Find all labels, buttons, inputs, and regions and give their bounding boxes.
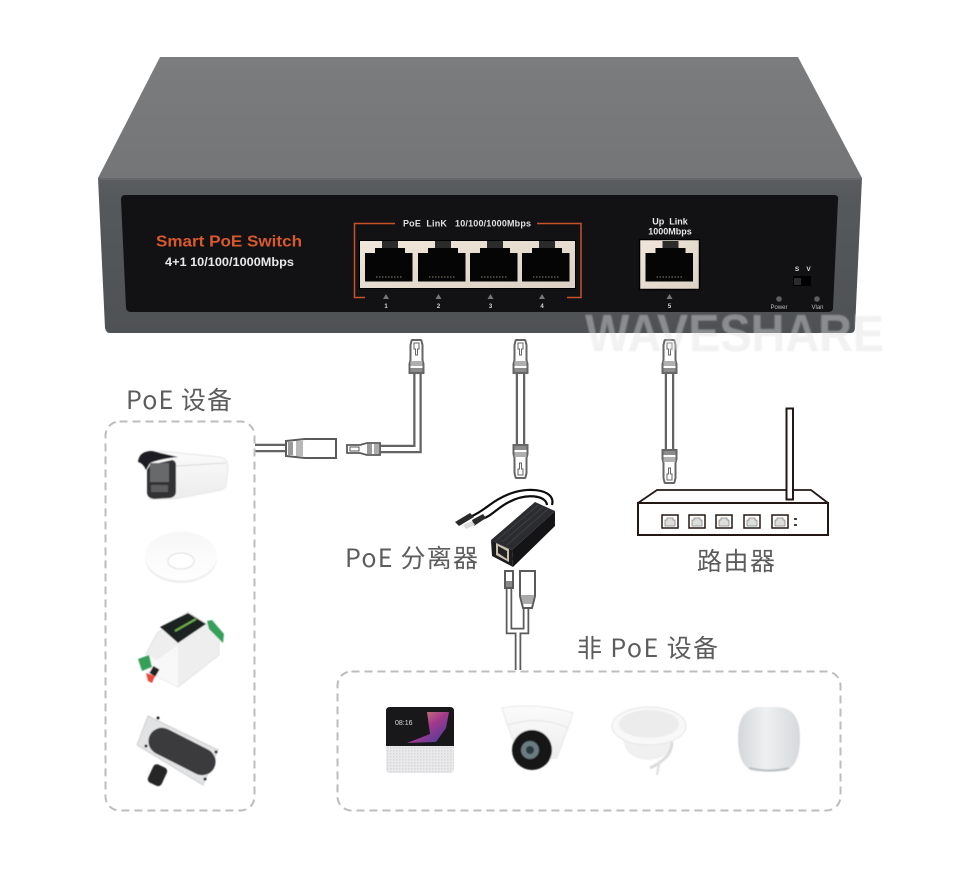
port numbers xyxy=(383,294,672,310)
LEDs xyxy=(770,296,824,311)
model title: Smart PoE Switch xyxy=(156,234,302,250)
splitter side face xyxy=(512,511,555,567)
PoE splitter xyxy=(455,490,555,567)
non-PoE heading: 非 PoE 设备 xyxy=(577,629,718,665)
S V dip switch xyxy=(793,266,811,286)
split power and data cable xyxy=(505,571,535,670)
port numbers: 3 xyxy=(489,304,493,310)
splitter cables xyxy=(472,490,552,519)
icon: ceiling access point xyxy=(145,532,217,583)
non-PoE devices panel xyxy=(338,672,840,810)
S V dip switch: V xyxy=(806,266,811,273)
port numbers: 5 xyxy=(668,304,672,310)
splitter top face xyxy=(491,502,555,550)
LEDs: Vlan xyxy=(811,305,824,311)
switch top face xyxy=(98,57,862,178)
orange bracket xyxy=(354,224,581,298)
icon: smart speaker xyxy=(738,707,800,772)
splitter plugs xyxy=(455,513,486,526)
splitter front face xyxy=(491,540,513,567)
switch front face xyxy=(98,178,862,333)
large plug xyxy=(520,571,535,608)
small plug xyxy=(505,571,513,588)
S V dip switch: S xyxy=(795,266,800,273)
icon: dome camera xyxy=(502,706,573,770)
splitter port xyxy=(496,543,509,562)
cable to router xyxy=(662,340,676,483)
port numbers: 4 xyxy=(540,304,544,310)
splitter label: PoE 分离器 xyxy=(345,539,478,575)
router top outline xyxy=(638,490,828,503)
router xyxy=(638,408,828,535)
cable to splitter xyxy=(514,340,528,478)
uplink label xyxy=(648,216,692,236)
watermark: WAVESHARE xyxy=(585,304,883,361)
cable to PoE devices xyxy=(255,340,424,458)
router ports xyxy=(662,515,797,528)
PoE link label: PoE LinK 10/100/1000Mbps xyxy=(403,218,531,228)
male connector xyxy=(347,443,380,455)
icon: din rail module xyxy=(138,612,224,687)
PoE devices heading: PoE 设备 xyxy=(126,381,232,417)
router body xyxy=(638,503,828,535)
icon: bullet camera xyxy=(138,451,228,499)
speed subtitle: 4+1 10/100/1000Mbps xyxy=(165,257,294,269)
uplink port xyxy=(640,240,700,290)
female connector xyxy=(286,439,336,458)
antenna xyxy=(786,408,793,500)
router label: 路由器 xyxy=(697,542,775,578)
front black panel xyxy=(121,195,838,312)
PoE ports xyxy=(359,240,576,289)
display clock: 08:16 xyxy=(395,720,413,727)
port numbers: 1 xyxy=(384,304,388,310)
PoE devices panel xyxy=(106,422,254,810)
LEDs: Power xyxy=(770,305,788,311)
icon: sensor xyxy=(137,716,220,787)
icon: smart display xyxy=(386,707,454,773)
watermark: WAVESHARE xyxy=(586,305,884,362)
switch body xyxy=(98,57,862,333)
uplink label: 1000Mbps xyxy=(648,226,692,236)
uplink label: Up Link xyxy=(652,216,689,226)
icon: ceiling speaker xyxy=(612,707,686,775)
port numbers: 2 xyxy=(437,304,441,310)
